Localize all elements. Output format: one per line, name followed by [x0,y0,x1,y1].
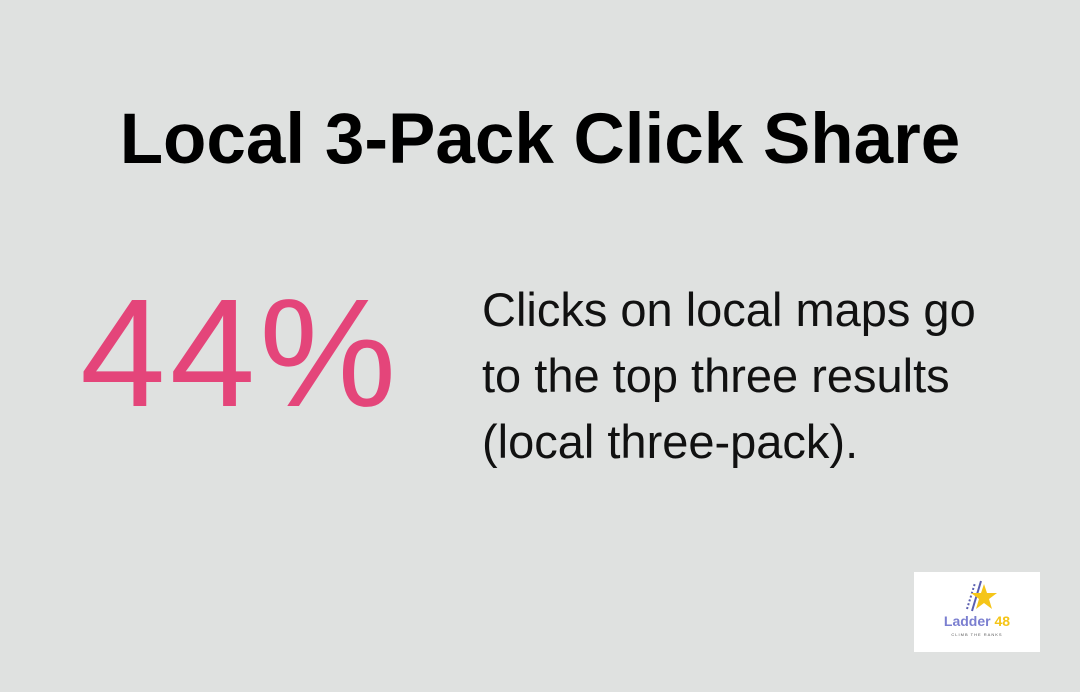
description text: (local three-pack). [482,415,858,468]
logo text: Ladder 48 [944,613,1010,629]
title: Local 3-Pack Click Share [120,100,960,179]
logo: CLIMB THE RANKS [951,632,1003,637]
description text: Clicks on local maps go [482,283,976,336]
description text [482,283,976,468]
logo [914,572,1040,652]
description text: to the top three results [482,349,950,402]
big stat: 44% [80,267,400,439]
icon: ladder star [966,580,997,612]
